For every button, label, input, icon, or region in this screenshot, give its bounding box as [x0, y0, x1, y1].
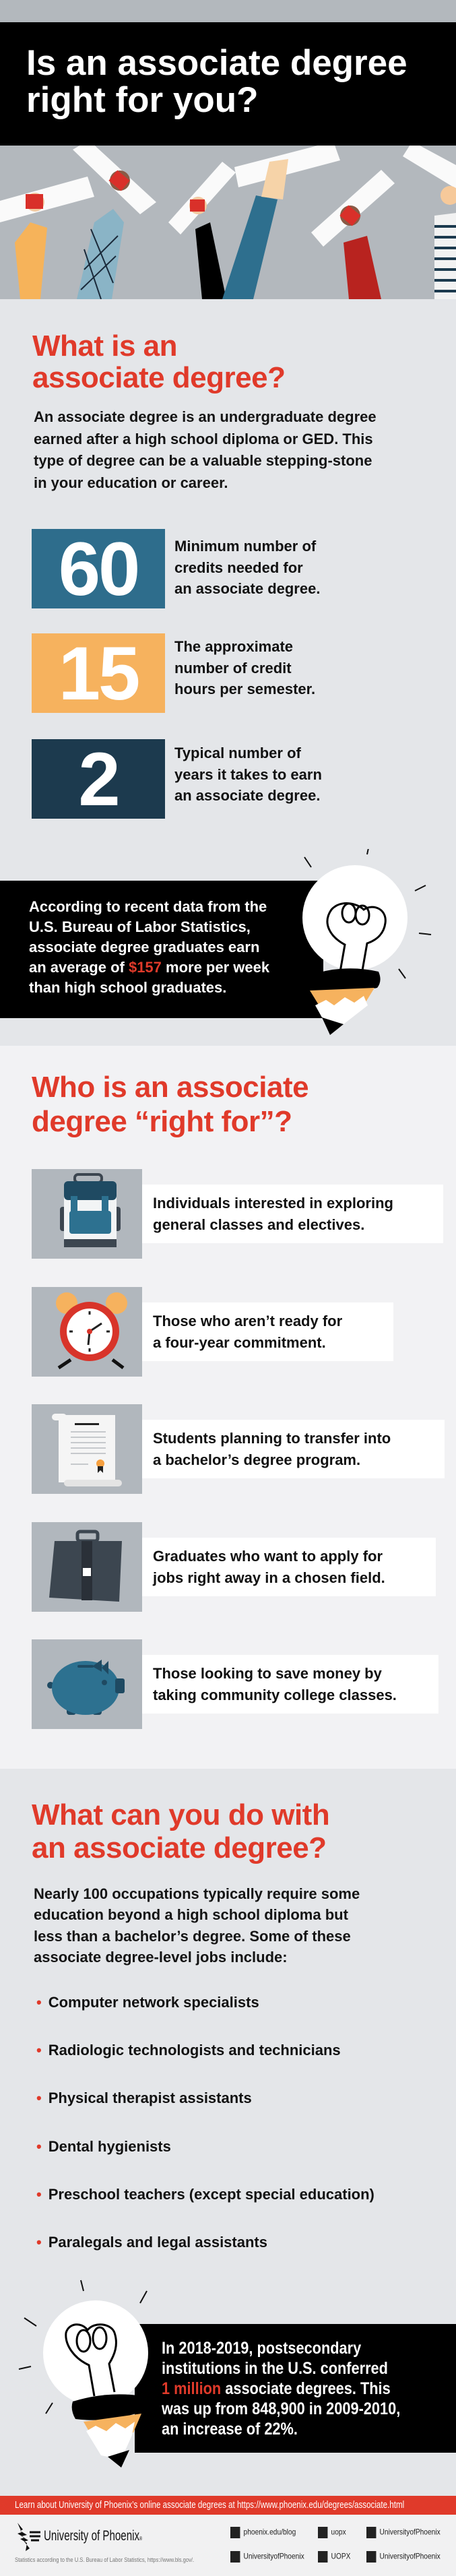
callout text: earnings: associate degree graduates earn [29, 939, 259, 955]
callout text: earnings: than high school graduates. [29, 979, 226, 996]
section 1 intro paragraph: in your education or career. [34, 474, 228, 491]
section 3 title: What can you do with [32, 1798, 329, 1831]
callout text: degrees conferred: institutions in the U.S. conferred [162, 2359, 388, 2378]
title: right for you? [26, 80, 258, 120]
item 2: alarm clock [32, 1287, 393, 1377]
social links: phoenix.edu/blog [244, 2527, 296, 2537]
callout text: earnings: an average of $157 more per week [29, 959, 269, 976]
logo [18, 2523, 143, 2551]
icon: diploma paper [32, 1404, 142, 1494]
section 1 intro paragraph: An associate degree is an undergraduate degree [34, 408, 377, 425]
stat 2 [32, 737, 322, 821]
stat text 2 [174, 745, 322, 804]
stat text 15 [174, 638, 315, 697]
callout text: degrees conferred: was up from 848,900 in 2009-2010, [162, 2399, 400, 2418]
stat text 60: credits needed for [174, 559, 303, 575]
stat text 60: Minimum number of [174, 538, 316, 555]
footer [0, 2515, 456, 2576]
job 6: • Paralegals and legal assistants [36, 2234, 267, 2251]
text: item 5 [142, 1655, 438, 1714]
section 3 title: an associate degree? [32, 1831, 327, 1864]
callout text: degrees conferred: In 2018-2019, postsecondary [162, 2339, 361, 2358]
section 2 title: degree “right for”? [32, 1105, 292, 1138]
section 3 title [32, 1798, 329, 1864]
number box 2: 2 [78, 737, 119, 821]
job list [36, 1994, 374, 2251]
section 1 intro paragraph: type of degree can be a valuable stepping-stone [34, 452, 372, 469]
stat text 15: hours per semester. [174, 681, 315, 697]
item 1: backpack [32, 1169, 443, 1259]
stat 15 [32, 631, 315, 716]
section 1 title: What is an [32, 329, 177, 363]
text: item 3 [142, 1420, 445, 1478]
icon: lightbulb pencil 1 [302, 849, 431, 1035]
stat text 2: an associate degree. [174, 787, 320, 804]
callout band: degrees conferred [135, 2324, 456, 2453]
section 3 paragraph: education beyond a high school diploma but [34, 1906, 348, 1923]
text: item 3: a bachelor’s degree program. [153, 1451, 360, 1468]
text: item 1 [142, 1185, 443, 1243]
text: item 2: Those who aren’t ready for [153, 1313, 342, 1329]
text: item 4: jobs right away in a chosen field. [153, 1569, 385, 1586]
section 1 title [32, 329, 285, 394]
callout text: earnings: According to recent data from the [29, 898, 267, 915]
callout text: degrees conferred: an increase of 22%. [162, 2420, 298, 2439]
text: item 1: general classes and electives. [153, 1216, 364, 1233]
number box 2 [32, 739, 165, 819]
stat 60 [32, 527, 320, 610]
job 5: • Preschool teachers (except special education) [36, 2186, 374, 2203]
text: item 2: a four-year commitment. [153, 1334, 326, 1350]
section 2 title: Who is an associate [32, 1071, 308, 1104]
text: item 1: Individuals interested in exploring [153, 1194, 393, 1212]
stat text 60: an associate degree. [174, 580, 320, 597]
section 3 paragraph: Nearly 100 occupations typically require some [34, 1885, 360, 1902]
item 4: briefcase [32, 1522, 436, 1612]
icon: piggy bank [32, 1639, 142, 1729]
stat text 2: Typical number of [174, 745, 301, 761]
icon: briefcase [32, 1522, 142, 1612]
title [26, 43, 408, 120]
social links: UniversityofPhoenix [380, 2552, 441, 2561]
icon: lightbulb pencil 2 [19, 2280, 148, 2468]
job 2: • Radiologic technologists and technicians [36, 2042, 341, 2059]
section 2 background [0, 1046, 456, 1769]
number box 15: 15 [59, 631, 138, 716]
logo: University of Phoenix® [44, 2528, 142, 2544]
social links [230, 2527, 441, 2563]
text: item 4 [142, 1538, 436, 1596]
text: item 5: Those looking to save money by [153, 1664, 382, 1682]
section 3 paragraph: associate degree-level jobs include: [34, 1949, 288, 1966]
footer link bar: Learn about University of Phoenix’s online associate degrees at https://www.phoenix.edu/degrees/associate.html [15, 2500, 404, 2511]
callout text: earnings [29, 898, 269, 996]
icon: backpack [32, 1169, 142, 1259]
title banner [0, 22, 456, 146]
social links: UniversityofPhoenix [244, 2552, 304, 2561]
number box 60: 60 [59, 527, 138, 610]
callout text: degrees conferred [162, 2339, 400, 2439]
top gray strip [0, 0, 456, 22]
callout band: earnings [0, 881, 323, 1018]
text: item 3: Students planning to transfer into [153, 1430, 391, 1446]
number box 15 [32, 633, 165, 713]
social links: uopx [331, 2527, 346, 2537]
section 1 intro paragraph: earned after a high school diploma or GED. This [34, 430, 373, 447]
hero illustration: arms holding diplomas [0, 146, 456, 299]
stat text 60 [174, 538, 320, 597]
stat text 2: years it takes to earn [174, 765, 322, 783]
social links: UOPX [331, 2552, 350, 2561]
job 1: • Computer network specialists [36, 1994, 259, 2011]
section 1 intro paragraph [34, 408, 377, 491]
number box 60 [32, 529, 165, 608]
title: Is an associate degree [26, 43, 408, 83]
footer link bar [0, 2496, 456, 2515]
section 1 title: associate degree? [32, 361, 285, 394]
social links: UniversityofPhoenix [380, 2527, 441, 2537]
section 2 title [32, 1071, 308, 1138]
callout text: earnings: U.S. Bureau of Labor Statistics, [29, 918, 251, 935]
text: item 4: Graduates who want to apply for [153, 1547, 383, 1565]
job 4: • Dental hygienists [36, 2138, 171, 2155]
item 5: piggy bank [32, 1639, 438, 1729]
item 3: diploma [32, 1404, 445, 1494]
stats source: Statistics according to the U.S. Bureau of Labor Statistics, https://www.bls.gov/. [15, 2556, 194, 2564]
section 3 paragraph [34, 1885, 360, 1966]
section 3 paragraph: less than a bachelor’s degree. Some of these [34, 1928, 351, 1945]
job 3: • Physical therapist assistants [36, 2090, 252, 2106]
text: item 5: taking community college classes. [153, 1686, 397, 1703]
stat text 15: number of credit [174, 659, 292, 677]
icon: alarm clock [32, 1287, 142, 1377]
callout text: degrees conferred: 1 million associate degrees. This [162, 2379, 391, 2398]
stat text 15: The approximate [174, 638, 293, 655]
text: item 2 [142, 1302, 393, 1361]
